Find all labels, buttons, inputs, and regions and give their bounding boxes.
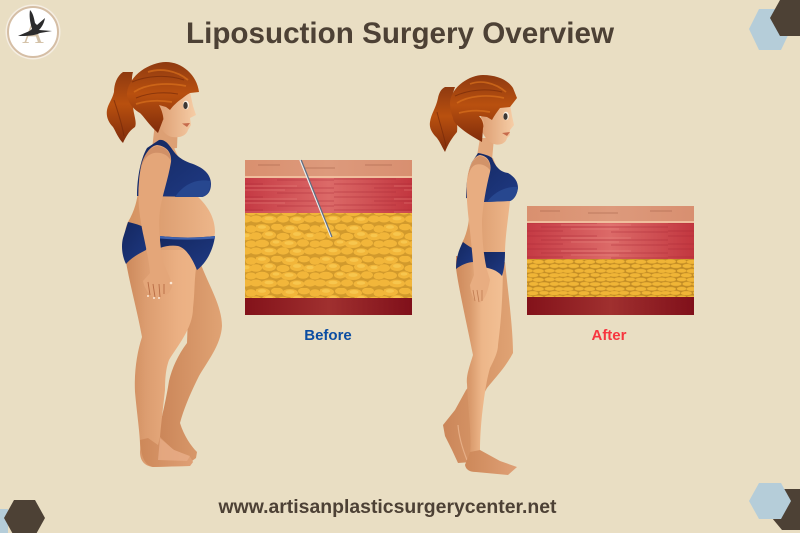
logo: A — [22, 17, 44, 50]
website url: www.artisanplasticsurgerycenter.net — [217, 497, 557, 518]
tissue diagram: after — [527, 206, 694, 315]
bikini bottom — [160, 236, 215, 270]
torso and belly — [125, 140, 215, 250]
neck — [152, 122, 178, 150]
ponytail — [430, 87, 457, 152]
arm and hand — [138, 145, 172, 299]
bikini bottom — [482, 252, 505, 276]
hair — [450, 75, 517, 142]
near leg — [456, 256, 503, 465]
far foot line — [458, 425, 467, 460]
shoulder shading — [140, 146, 171, 172]
bikini top — [137, 140, 211, 197]
face — [480, 104, 514, 145]
near leg — [124, 240, 197, 467]
far leg — [443, 262, 513, 463]
near foot — [465, 450, 517, 475]
ponytail — [107, 72, 136, 143]
cannula needle — [300, 160, 332, 237]
ear — [476, 118, 484, 128]
foot shading — [140, 437, 193, 467]
arm and hand — [467, 155, 491, 303]
label: before: Before — [304, 327, 352, 344]
bikini top — [466, 153, 518, 202]
hair — [127, 62, 199, 133]
decoration: bottom right hexagons — [749, 483, 800, 530]
decoration: bottom left hexagons — [0, 500, 45, 533]
shoulder shading — [468, 156, 490, 178]
ear — [155, 106, 163, 118]
torso — [457, 155, 510, 262]
far leg — [160, 255, 222, 461]
logo — [6, 4, 60, 60]
tissue diagram: before — [245, 160, 412, 315]
decoration: top right hexagons — [749, 0, 800, 50]
figure: woman before liposuction — [107, 62, 222, 467]
title: Liposuction Surgery Overview — [186, 17, 615, 50]
neck — [476, 138, 494, 162]
face — [157, 92, 196, 137]
label: after: After — [591, 327, 627, 344]
figure: woman after liposuction — [430, 75, 518, 475]
